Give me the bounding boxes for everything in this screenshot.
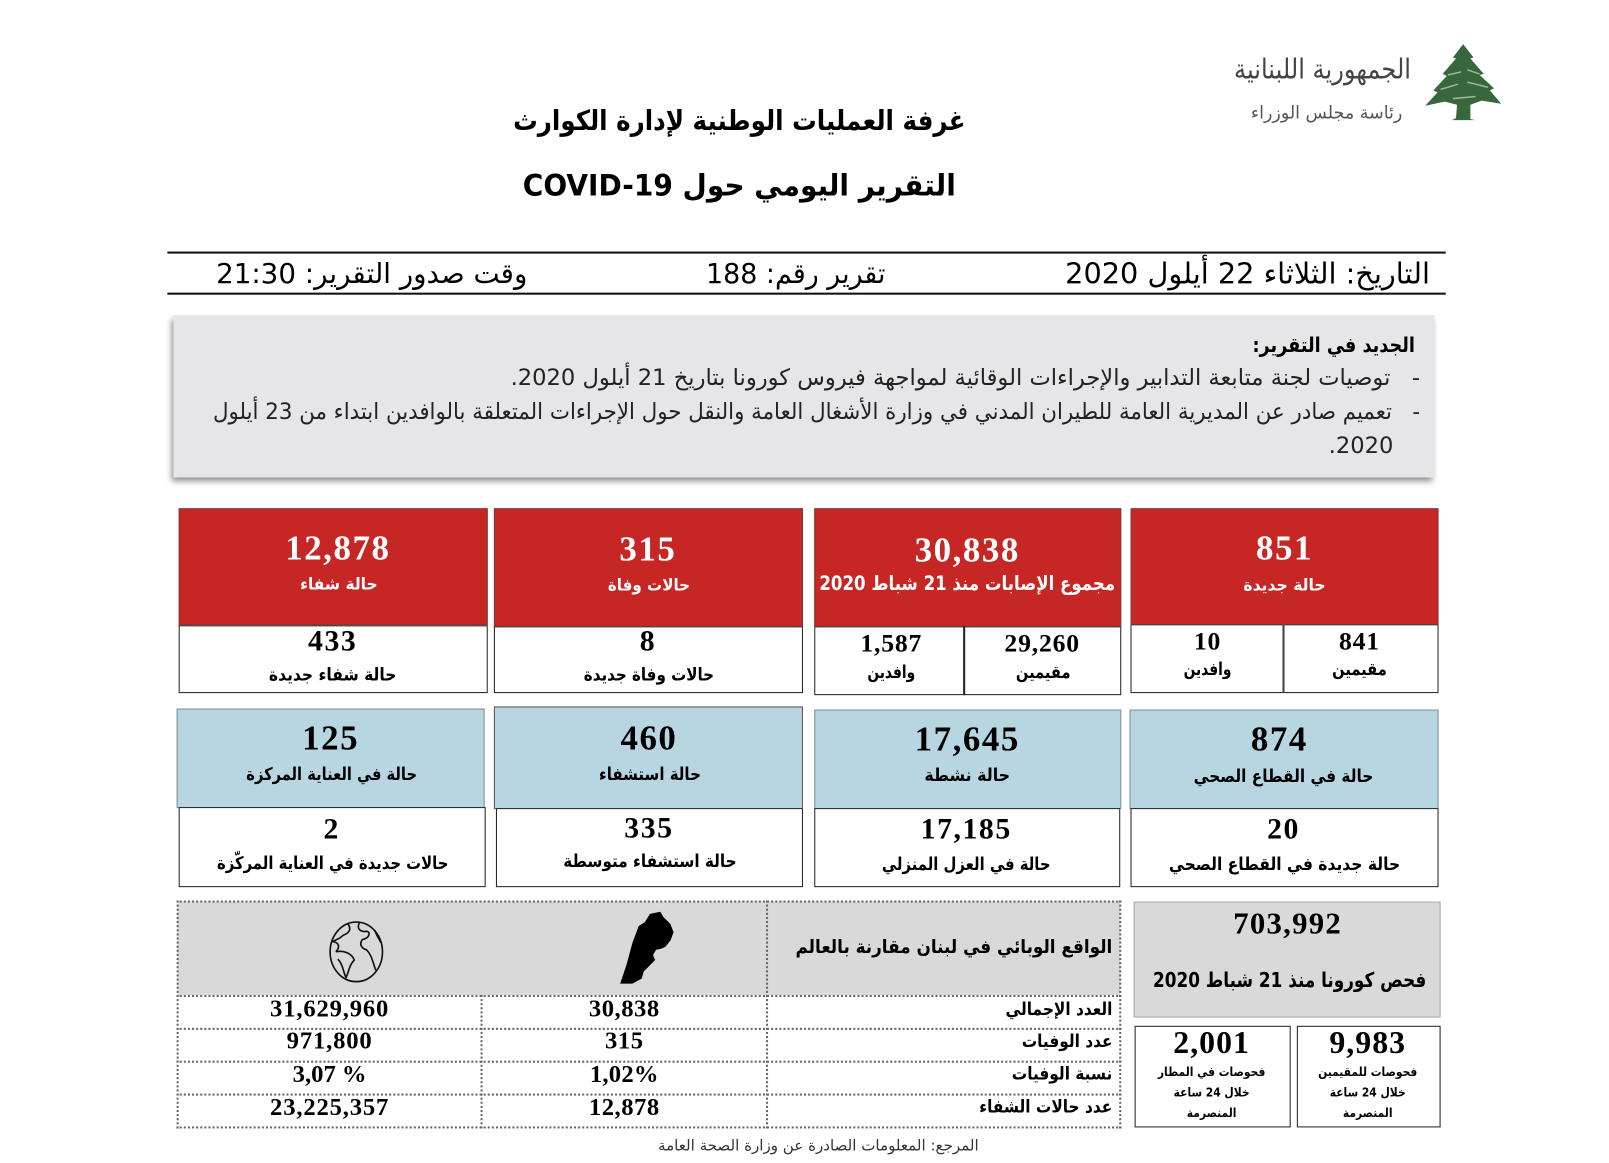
arrivals cases: 1,587 (860, 630, 922, 658)
Lebanon values: 30,838 (589, 996, 660, 1023)
card: recoveries (178, 508, 488, 694)
icon: globe (329, 921, 384, 982)
card: ICU: حالة في العناية المركزة (246, 764, 417, 785)
card: total cases (814, 508, 1122, 696)
white footer (814, 808, 1120, 887)
bullet one: - توصيات لجنة متابعة التدابير والإجراءات الوقائية لمواجهة فيروس كورونا بتاريخ 21 أيلول 2020. (511, 366, 1420, 391)
card: hospitalised: حالة استشفاء (599, 764, 701, 785)
total recoveries: 12,878 (285, 530, 390, 568)
airport tests number: 2,001 (1173, 1024, 1250, 1060)
comparison table: Lebanon vs world: 315 (605, 1028, 644, 1055)
subtitle: التقرير اليومي حول COVID-19 (523, 168, 956, 203)
resident tests label: فحوصات للمقيمين (1318, 1065, 1417, 1079)
report number: تقرير رقم: 188 (706, 258, 886, 290)
white footer (179, 625, 488, 693)
card: new cases: حالة جديدة (1243, 575, 1326, 595)
hospitalised total: 460 (620, 720, 677, 758)
blue header (494, 706, 803, 809)
panel: total PCR tests (1134, 902, 1441, 1018)
card: deaths (494, 508, 803, 694)
card: new cases: مقيمين (1332, 660, 1387, 680)
card: deaths: حالات وفاة (608, 575, 690, 595)
icon: Lebanon map (620, 912, 674, 984)
white footer (179, 807, 486, 887)
card: active (814, 710, 1122, 888)
card: new cases: وافدين (1184, 660, 1231, 680)
comparison table: Lebanon vs world: 1,02% (590, 1062, 659, 1088)
total cases: 30,838 (915, 532, 1020, 570)
what's new heading: الجديد في التقرير: (1252, 333, 1415, 357)
comparison table: Lebanon vs world: 12,878 (589, 1095, 660, 1121)
logo: Lebanese cedar and presidency text (1234, 44, 1502, 124)
card: active: حالة في العزل المنزلي (882, 855, 1051, 875)
panel: airport tests: خلال 24 ساعة (1174, 1085, 1250, 1100)
report time: وقت صدور التقرير: 21:30 (216, 258, 527, 290)
new recoveries: 433 (308, 625, 357, 658)
world values: 31,629,960 (270, 996, 389, 1023)
card: hospitalised: حالة استشفاء متوسطة (563, 852, 737, 872)
new arrivals: 10 (1194, 628, 1221, 656)
new health sector: 20 (1267, 813, 1300, 846)
card: recoveries: حالة شفاء (300, 574, 378, 593)
total tests number: 703,992 (1233, 907, 1342, 941)
comparison table: Lebanon vs world: نسبة الوفيات (1011, 1064, 1112, 1085)
white footer (1131, 624, 1439, 693)
panel: resident tests (1297, 1026, 1441, 1127)
red header (494, 508, 803, 627)
red header (179, 508, 488, 625)
logo text: Lebanese Republic: الجمهورية اللبنانية (1234, 54, 1411, 86)
card: deaths: حالات وفاة جديدة (584, 665, 714, 685)
bullet two: - تعميم صادر عن المديرية العامة للطيران المدني في وزارة الأشغال العامة والنقل حول الإجراءات المتعلقة بالوافدين ابتداء من 23 أيلول (213, 399, 1420, 425)
comparison table: Lebanon vs world: 971,800 (287, 1028, 373, 1055)
resident tests number: 9,983 (1329, 1024, 1406, 1060)
card: total cases: مجموع الإصابات منذ 21 شباط 2020 (819, 572, 1115, 595)
title: غرفة العمليات الوطنية لإدارة الكوارث (513, 105, 965, 137)
source note: المرجع: المعلومات الصادرة عن وزارة الصحة العامة (658, 1137, 979, 1155)
card: hospitalised (494, 706, 803, 888)
new residents: 841 (1339, 628, 1380, 656)
moderate hospitalised: 335 (624, 812, 674, 845)
red header (1131, 508, 1439, 625)
blue header (177, 708, 485, 808)
logo text: Presidency of the Council of Ministers: رئاسة مجلس الوزراء (1251, 103, 1402, 124)
panel: what's new in the report (174, 315, 1434, 477)
row labels: العدد الإجمالي (1005, 1000, 1112, 1020)
card: health sector (1129, 710, 1439, 888)
card: total cases: مقيمين (1016, 663, 1071, 683)
comparison table: Lebanon vs world: 23,225,357 (270, 1095, 389, 1121)
panel: resident tests: خلال 24 ساعة (1330, 1085, 1406, 1100)
active total: 17,645 (915, 721, 1020, 759)
card: health sector: حالة في القطاع الصحي (1194, 767, 1373, 787)
card: active: حالة نشطة (924, 765, 1010, 786)
card: health sector: حالة جديدة في القطاع الصحي (1169, 855, 1400, 875)
red header (814, 508, 1121, 627)
total deaths: 315 (619, 531, 676, 569)
icon: cedar tree (1425, 44, 1502, 120)
bullet two continued: 2020. (1329, 433, 1393, 459)
card: total cases: وافدين (867, 663, 915, 683)
report meta bar (167, 252, 1446, 295)
total tests label: فحص كورونا منذ 21 شباط 2020 (1153, 967, 1426, 992)
card: ICU (176, 708, 486, 888)
airport tests label: فحوصات في المطار (1158, 1065, 1265, 1079)
comparison table: Lebanon vs world: عدد الوفيات (1021, 1031, 1112, 1052)
blue header (814, 710, 1121, 809)
health sector total: 874 (1251, 721, 1308, 759)
new deaths: 8 (640, 625, 656, 658)
panel: airport tests (1135, 1026, 1291, 1127)
white footer (494, 626, 803, 693)
panel: airport tests: المنصرمة (1187, 1106, 1236, 1120)
white footer (496, 808, 803, 887)
panel: resident tests: المنصرمة (1343, 1106, 1393, 1120)
comparison table: Lebanon vs world: عدد حالات الشفاء (979, 1097, 1112, 1118)
home isolation: 17,185 (921, 813, 1012, 846)
residents cases: 29,260 (1004, 630, 1080, 658)
blue header (1129, 710, 1439, 809)
card: new cases (1130, 508, 1439, 694)
table heading: الواقع الوبائي في لبنان مقارنة بالعالم (795, 936, 1112, 958)
card: recoveries: حالة شفاء جديدة (269, 665, 396, 685)
white footer (814, 626, 1121, 695)
new cases: 851 (1256, 530, 1313, 568)
comparison table: Lebanon vs world: 3,07 % (293, 1062, 367, 1088)
card: ICU: حالات جديدة في العناية المركّزة (217, 854, 448, 874)
white footer (1131, 808, 1439, 887)
comparison table: Lebanon vs world (176, 900, 1122, 1128)
ICU total: 125 (302, 720, 359, 758)
report date: التاريخ: الثلاثاء 22 أيلول 2020 (1065, 257, 1430, 291)
ICU new: 2 (323, 813, 340, 846)
